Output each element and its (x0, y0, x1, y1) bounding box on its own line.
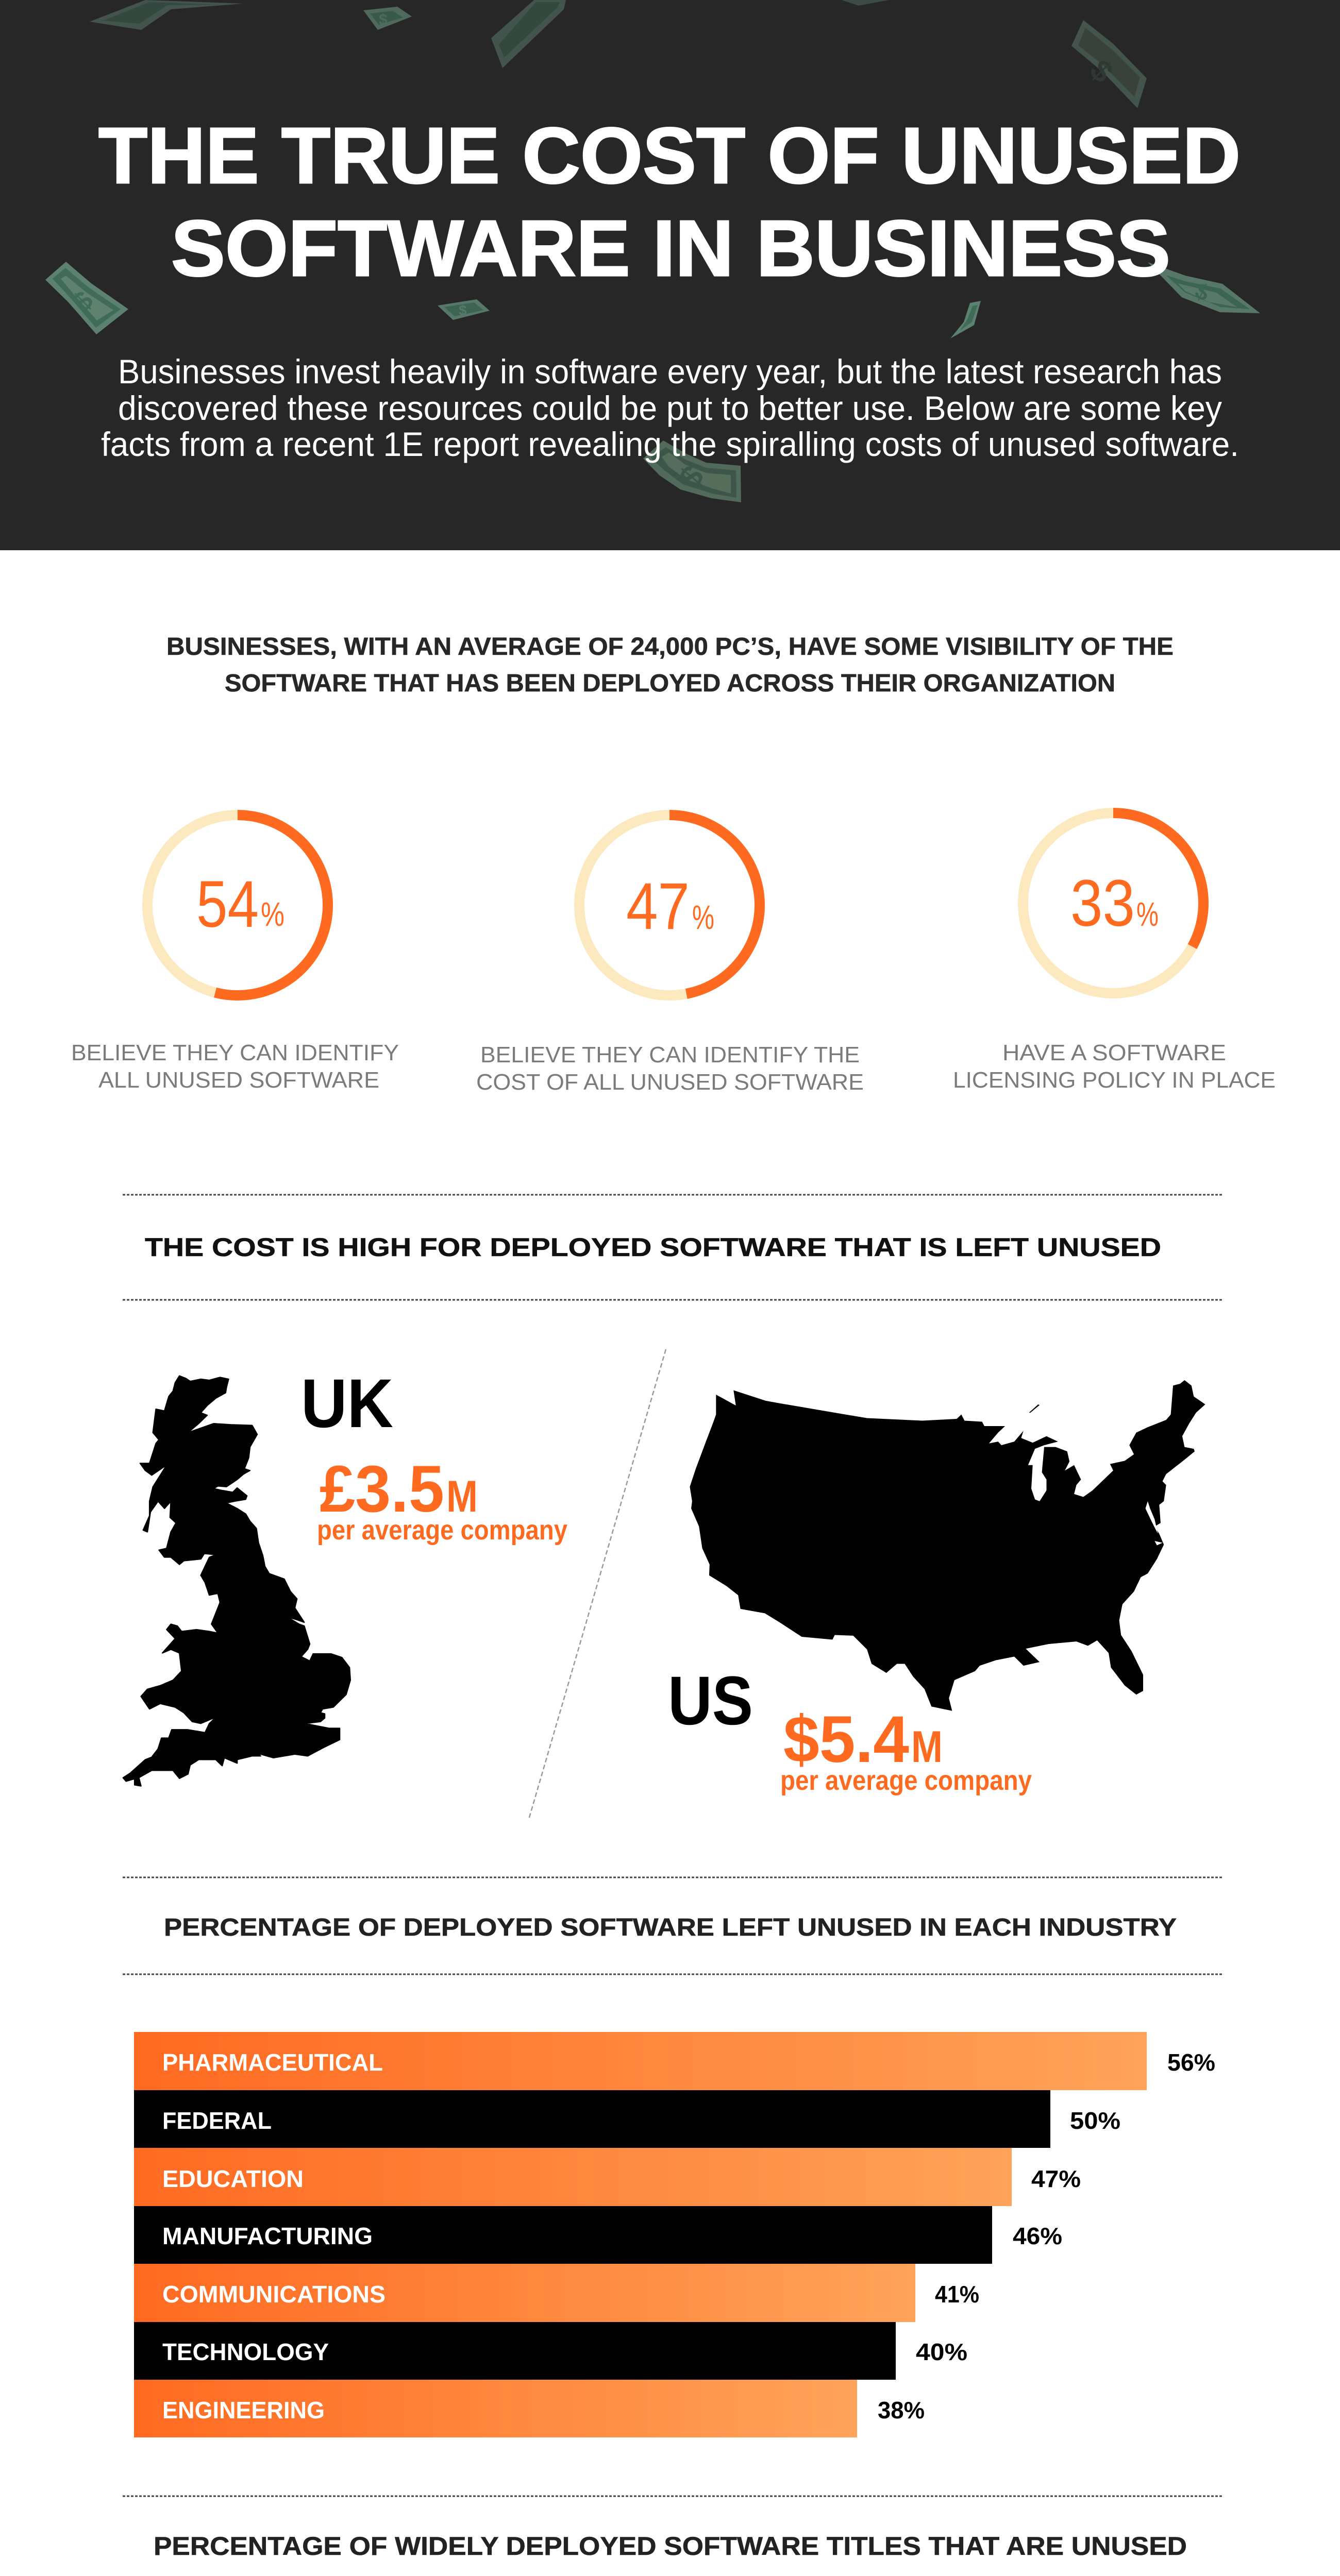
US value (780, 1703, 1032, 1796)
intro text: discovered these resources could be put to better use. Below are some key (118, 389, 1222, 427)
label: 47% (476, 1042, 864, 1095)
US value: $5.4 (783, 1703, 909, 1776)
donut: 54% (147, 815, 328, 995)
heading: THE COST IS HIGH FOR DEPLOYED SOFTWARE THAT IS LEFT UNUSED (145, 1233, 1161, 1262)
donut: 47% (579, 815, 760, 995)
icon: falling banknotes: $ (673, 459, 711, 496)
map: UK (123, 1376, 350, 1786)
donut: 33%: 33 (1070, 867, 1135, 940)
intro text (101, 352, 1239, 463)
label: 33% (953, 1040, 1276, 1093)
bar: engineering: ENGINEERING (162, 2397, 325, 2424)
label: 47%: BELIEVE THEY CAN IDENTIFY THE (480, 1042, 860, 1067)
bar: manufacturing: 46% (1013, 2223, 1062, 2249)
bar: technology: TECHNOLOGY (162, 2338, 329, 2365)
label: 33%: LICENSING POLICY IN PLACE (953, 1067, 1276, 1093)
icon: falling banknotes: $ (1191, 278, 1213, 307)
bar: engineering (134, 2380, 925, 2437)
donut: 47%: % (692, 898, 714, 936)
US label: US (668, 1663, 753, 1739)
label: 54% (71, 1040, 399, 1093)
icon: falling banknotes: $ (66, 285, 99, 318)
bar: education (134, 2148, 1081, 2206)
bar: communications: COMMUNICATIONS (162, 2281, 386, 2308)
map: US (690, 1380, 1205, 1711)
bar: communications: 41% (935, 2281, 979, 2308)
label: 54%: ALL UNUSED SOFTWARE (98, 1067, 379, 1093)
bar: federal (134, 2090, 1120, 2148)
label: 47%: COST OF ALL UNUSED SOFTWARE (476, 1070, 864, 1095)
UK value: £3.5 (320, 1452, 444, 1526)
title: SOFTWARE IN BUSINESS (171, 204, 1170, 293)
bar: federal: 50% (1070, 2107, 1120, 2134)
bar: technology (134, 2322, 967, 2380)
US value: M (911, 1722, 943, 1772)
heading: PERCENTAGE OF WIDELY DEPLOYED SOFTWARE TITLES THAT ARE UNUSED (154, 2532, 1187, 2561)
US value: per average company (780, 1765, 1032, 1796)
UK value: M (446, 1472, 478, 1521)
icon: falling banknotes: $ (1083, 53, 1120, 89)
heading (166, 633, 1174, 697)
heading: SOFTWARE THAT HAS BEEN DEPLOYED ACROSS THEIR ORGANIZATION (225, 670, 1115, 697)
bar: communications (134, 2264, 979, 2322)
panel: header (0, 0, 1340, 550)
donut: 47%: 47 (626, 870, 690, 943)
heading: BUSINESSES, WITH AN AVERAGE OF 24,000 PC’S, HAVE SOME VISIBILITY OF THE (166, 633, 1174, 660)
donut: 54%: % (261, 895, 284, 933)
heading: PERCENTAGE OF DEPLOYED SOFTWARE LEFT UNUSED IN EACH INDUSTRY (164, 1914, 1177, 1941)
bar: education: 47% (1031, 2165, 1081, 2192)
bar: manufacturing (134, 2206, 1062, 2264)
bar: education: EDUCATION (162, 2165, 304, 2192)
label: 33%: HAVE A SOFTWARE (1002, 1040, 1226, 1065)
panel: unused software by industry (134, 1914, 1215, 2437)
icon: falling banknotes: $ (379, 11, 388, 28)
title: THE TRUE COST OF UNUSED (98, 111, 1241, 200)
bar chart: industries (134, 2032, 1215, 2437)
UK label: UK (301, 1365, 393, 1442)
bar: pharmaceutical (134, 2032, 1215, 2090)
icon: falling banknotes: $ (459, 302, 467, 318)
bar: engineering: 38% (878, 2397, 925, 2424)
bar: pharmaceutical: 56% (1167, 2049, 1215, 2076)
intro text: facts from a recent 1E report revealing the spiralling costs of unused software. (101, 425, 1239, 463)
bar: technology: 40% (916, 2338, 967, 2365)
donut: 54%: 54 (196, 868, 259, 941)
label: 54%: BELIEVE THEY CAN IDENTIFY (71, 1040, 399, 1065)
bar: pharmaceutical: PHARMACEUTICAL (162, 2049, 383, 2076)
donut: 33% (1023, 813, 1203, 993)
panel: cost by country (123, 1233, 1205, 1819)
UK value (317, 1452, 567, 1546)
panel: visibility statistics (71, 633, 1276, 1095)
title (98, 111, 1241, 293)
bar: manufacturing: MANUFACTURING (162, 2223, 373, 2249)
icon: falling banknotes (45, 0, 1260, 502)
bar: federal: FEDERAL (162, 2107, 272, 2134)
intro text: Businesses invest heavily in software every year, but the latest research has (118, 352, 1222, 391)
UK value: per average company (317, 1515, 567, 1546)
donut: 33%: % (1136, 895, 1159, 933)
